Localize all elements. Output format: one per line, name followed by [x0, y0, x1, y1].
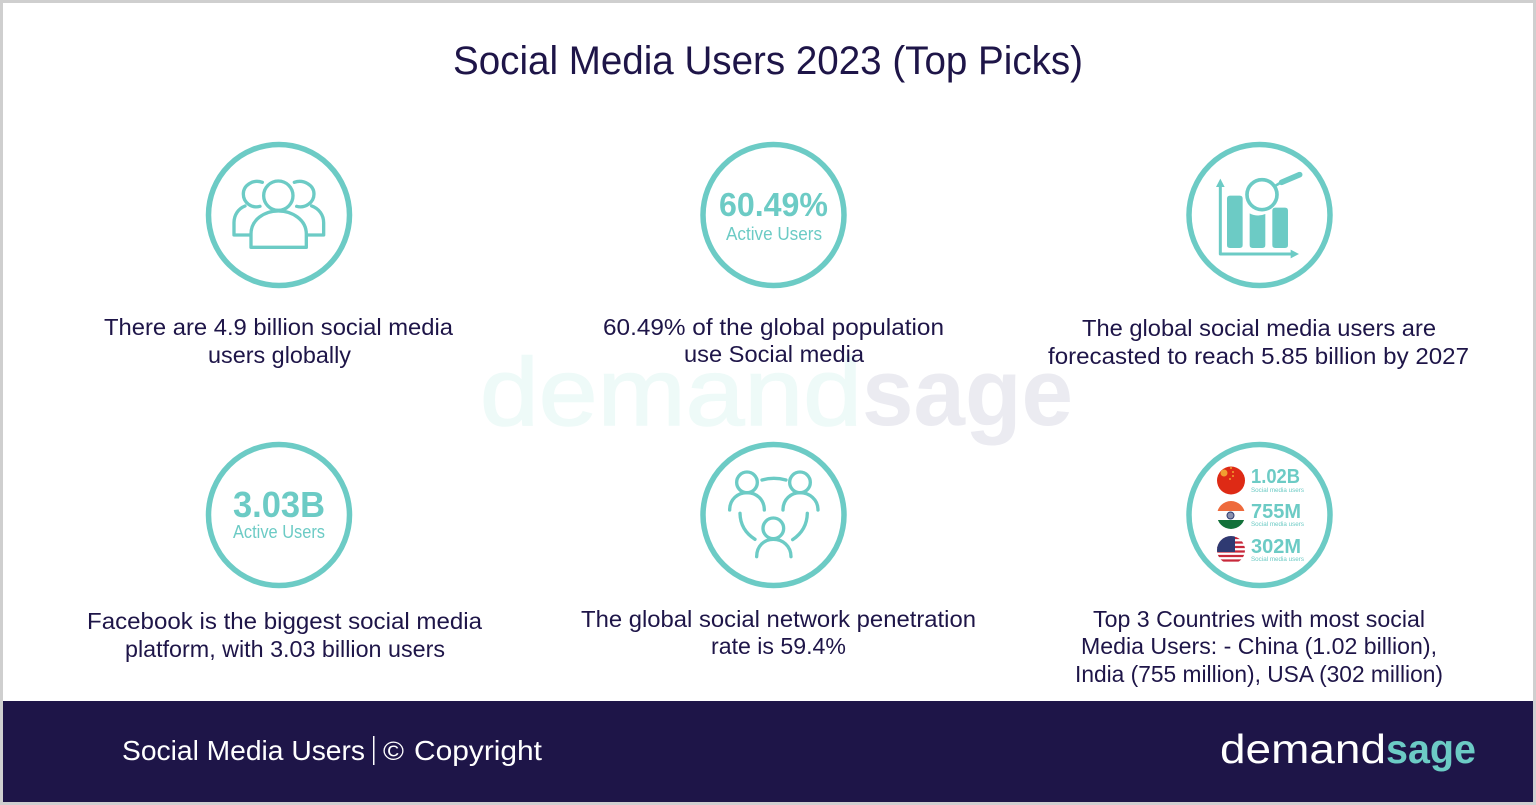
flag: China: [1217, 466, 1245, 495]
flag: India: [1217, 501, 1245, 529]
icon: connected people: [703, 444, 844, 586]
text: total users: users globally: [208, 342, 351, 368]
text: total users: There are 4.9 billion social media: [104, 314, 453, 340]
title: Social Media Users 2023 (Top Picks): [453, 39, 1083, 83]
text: population share: [603, 314, 944, 367]
stat: India: Social media users: [1251, 522, 1304, 528]
text: facebook: platform, with 3.03 billion users: [125, 636, 445, 662]
panel: facebook: [87, 444, 482, 662]
watermark: demand: [480, 339, 862, 446]
text: top countries: India (755 million), USA (302 million): [1075, 661, 1443, 687]
stat badge: 60.49%: 60.49%: [719, 186, 828, 223]
footer bar: [3, 701, 1533, 802]
text: top countries: [1075, 606, 1443, 687]
text: population share: use Social media: [684, 341, 864, 367]
panel: total users: [104, 144, 453, 368]
logo: demandsage: sage: [1386, 726, 1476, 772]
panel: active users share: [603, 144, 944, 367]
stat: India: 755M: [1251, 501, 1301, 523]
text: population share: 60.49% of the global population: [603, 314, 944, 340]
stat badge: 3.03B: 3.03B: [233, 484, 325, 525]
footer caption: [122, 735, 542, 766]
text: penetration: The global social network penetration: [581, 606, 976, 632]
icon: bar chart with magnifier: [1189, 144, 1330, 286]
text: total users: [104, 314, 453, 368]
panel: penetration: [581, 444, 976, 659]
watermark: [480, 339, 1073, 446]
stat badge: 60.49%: Active Users: [726, 224, 822, 244]
badge: country stats: [1189, 444, 1330, 586]
panel: top countries: [1075, 444, 1443, 687]
text: forecast: The global social media users are: [1082, 315, 1436, 341]
footer caption: ©: [383, 736, 404, 766]
text: top countries: Top 3 Countries with most social: [1093, 606, 1425, 632]
text: penetration: [581, 606, 976, 659]
text: penetration: rate is 59.4%: [711, 633, 846, 659]
text: forecast: [1048, 315, 1469, 369]
text: forecast: forecasted to reach 5.85 billion by 2027: [1048, 343, 1469, 369]
panel: forecast: [1048, 144, 1469, 369]
logo: demandsage: [1220, 726, 1476, 772]
stat: USA: Social media users: [1251, 557, 1304, 563]
text: top countries: Media Users: - China (1.02 billion),: [1081, 633, 1437, 659]
stat: China: Social media users: [1251, 488, 1304, 494]
icon: group of people: [208, 144, 350, 286]
stat: China: 1.02B: [1251, 466, 1300, 488]
text: facebook: Facebook is the biggest social media: [87, 608, 482, 634]
stat badge: 3.03B: Active Users: [233, 522, 325, 542]
watermark: sage: [862, 339, 1073, 446]
text: facebook: [87, 608, 482, 662]
logo: demandsage: demand: [1220, 726, 1386, 772]
stat badge: 3.03B: [208, 444, 350, 586]
stat badge: 60.49%: [703, 144, 844, 286]
flag: USA: [1217, 536, 1245, 564]
stat: USA: 302M: [1251, 536, 1301, 558]
footer caption: Copyright: [414, 735, 542, 766]
footer caption: Social Media Users: [122, 735, 365, 766]
